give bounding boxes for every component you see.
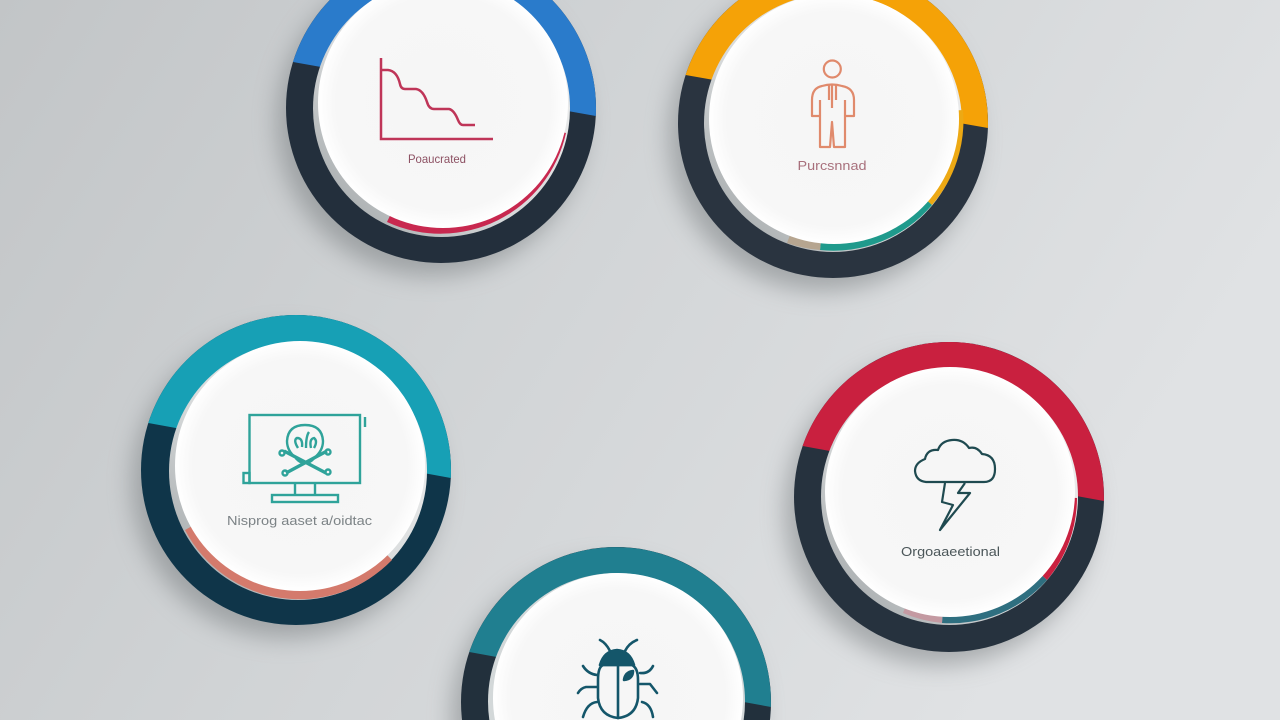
teal ring segment bbox=[148, 315, 451, 478]
white plate bbox=[825, 367, 1075, 617]
orange crescent bbox=[834, 110, 963, 205]
label: monitor: Nisprog aaset a/oidtac bbox=[227, 513, 373, 528]
dark outer ring bbox=[286, 0, 596, 263]
label: cloud: Orgoaaeetional bbox=[901, 544, 1000, 559]
dark outer ring bbox=[794, 342, 1104, 652]
label: chart: Poaucrated bbox=[408, 152, 466, 166]
teal crescent bbox=[820, 119, 932, 251]
panel: orange person disc bbox=[669, 0, 988, 291]
white plate bbox=[175, 341, 425, 591]
panel: blue chart disc bbox=[277, 0, 596, 276]
red crescent bbox=[387, 103, 566, 234]
white plate bbox=[493, 573, 743, 720]
icon: monitor with skull bbox=[244, 415, 365, 502]
panel: teal bug disc bbox=[452, 547, 771, 720]
icon: bug bbox=[578, 640, 657, 718]
inner rim bbox=[704, 0, 962, 252]
blue ring segment bbox=[293, 0, 596, 116]
orange ring segment bbox=[686, 0, 988, 128]
pink crescent bbox=[903, 492, 950, 623]
white plate bbox=[318, 0, 568, 228]
icon: person bbox=[812, 60, 854, 147]
icon: declining line chart bbox=[381, 58, 493, 139]
white plate bbox=[709, 0, 959, 244]
blue crescent bbox=[942, 492, 1047, 623]
inner rim bbox=[821, 368, 1078, 625]
coral crescent bbox=[185, 466, 392, 599]
dark outer ring bbox=[678, 0, 988, 278]
inner rim bbox=[313, 0, 570, 237]
panel: red cloud disc bbox=[785, 342, 1104, 665]
inner rim bbox=[488, 573, 745, 720]
panel: teal monitor disc bbox=[132, 315, 451, 638]
dark outer ring bbox=[141, 315, 451, 625]
tan crescent bbox=[787, 119, 834, 250]
red ring segment bbox=[803, 342, 1104, 501]
dark outer ring bbox=[461, 547, 771, 720]
red crescent bbox=[950, 492, 1077, 580]
teal ring segment bbox=[469, 547, 771, 707]
inner rim bbox=[169, 342, 427, 600]
label: person: Purcsnnad bbox=[798, 158, 866, 173]
icon: storm cloud bbox=[915, 440, 995, 530]
